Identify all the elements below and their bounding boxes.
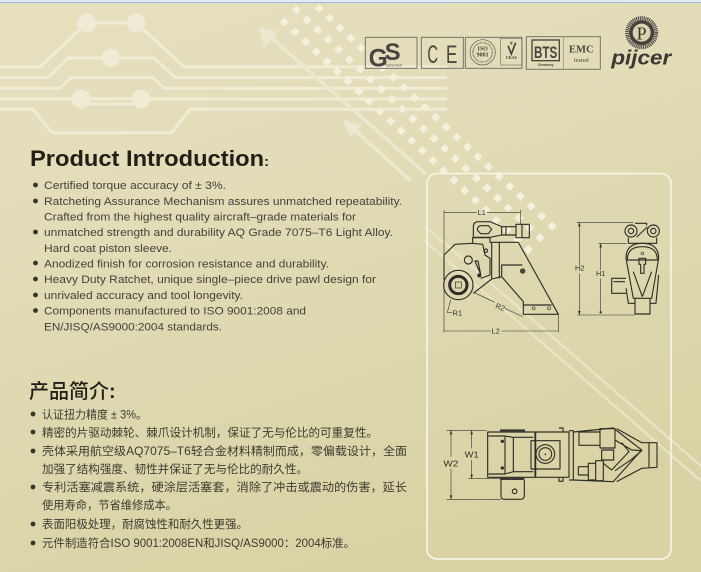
top view dimensions: W2 xyxy=(443,458,459,468)
logo: GS xyxy=(365,37,417,73)
logo: ISO 9001 UKAS: ♛ xyxy=(509,40,513,45)
English feature list xyxy=(33,180,402,334)
diagram: side view xyxy=(444,208,558,336)
front view dimensions: H1 xyxy=(596,269,605,278)
wrench front view xyxy=(612,223,659,314)
logo: GS: S xyxy=(385,39,401,66)
side view dimensions xyxy=(444,208,558,336)
logo: BTS EMC: Germany xyxy=(538,63,555,67)
side view dimensions: R2 xyxy=(494,301,506,313)
logo: CE xyxy=(421,37,463,69)
English feature list: EN/JISQ/AS9000:2004 standards. xyxy=(44,322,222,334)
wrench side view xyxy=(444,222,558,314)
logo: GS: G xyxy=(369,46,388,73)
Chinese feature list: 壳体采用航空级AQ7075–T6轻合金材料精制而成，零偏载设计，全面 xyxy=(42,444,407,458)
logo: BTS EMC: EMC xyxy=(569,45,594,56)
logo: ISO 9001 UKAS: UKAS xyxy=(506,55,518,60)
logo: CE: E xyxy=(446,42,457,69)
English feature list: Components manufactured to ISO 9001:2008 and xyxy=(44,306,306,318)
English feature list: Ratcheting Assurance Mechanism assures unmatched repeatability. xyxy=(44,196,402,208)
diagram: top view xyxy=(443,428,657,499)
diagonal arrows xyxy=(259,27,701,481)
Chinese feature list: 使用寿命，节省维修成本。 xyxy=(42,498,177,512)
side view dimensions: L2 xyxy=(492,327,500,336)
Chinese title: 产品简介: xyxy=(29,380,116,403)
front view dimensions xyxy=(575,222,635,315)
Chinese feature list: 精密的片驱动棘轮、棘爪设计机制，保证了无与伦比的可重复性。 xyxy=(42,426,378,440)
diamond dot bands xyxy=(282,6,554,252)
logo: ISO 9001 UKAS xyxy=(465,37,522,68)
logo: BTS EMC: tested xyxy=(574,57,590,64)
logo: GS: Sicherheit xyxy=(385,64,402,68)
logo: BTS EMC: BTS xyxy=(534,43,557,62)
logo: pijcer: P xyxy=(637,23,647,43)
Chinese feature list: 元件制造符合ISO 9001:2008EN和JISQ/AS9000：2004标准。 xyxy=(42,536,355,550)
logo: BTS EMC xyxy=(526,37,600,69)
English feature list: Certified torque accuracy of ± 3%. xyxy=(44,180,226,192)
logo: pijcer: pijcer xyxy=(610,47,672,70)
logo: ISO 9001 UKAS: 9001 xyxy=(477,53,489,59)
wrench top view xyxy=(488,428,657,499)
front view dimensions: H2 xyxy=(575,263,584,272)
top view dimensions xyxy=(443,430,501,499)
logo: CE: C xyxy=(427,42,438,69)
English feature list: Anodized finish for corrosion resistance and durability. xyxy=(44,258,329,270)
Chinese feature list: 专利活塞减震系统，硬涂层活塞套，消除了冲击或震动的伤害，延长 xyxy=(42,480,407,494)
certification logos xyxy=(365,18,672,73)
logo: ISO 9001 UKAS: ISO xyxy=(478,47,488,53)
side view dimensions: L1 xyxy=(478,208,486,217)
English feature list: unmatched strength and durability AQ Grade 7075–T6 Light Alloy. xyxy=(44,227,393,239)
English feature list: Heavy Duty Ratchet, unique single–piece drive pawl design for xyxy=(44,274,376,286)
circuit board pattern xyxy=(0,14,447,133)
side view dimensions: R1 xyxy=(453,309,462,318)
English feature list: Crafted from the highest quality aircraft–grade materials for xyxy=(44,212,356,224)
top view dimensions: W1 xyxy=(465,449,479,459)
Chinese feature list: 加强了结构强度、韧性并保证了无与伦比的耐久性。 xyxy=(42,462,308,476)
diagram: front view xyxy=(575,222,659,315)
panel: dimension drawings frame xyxy=(427,174,671,559)
English feature list: unrivaled accuracy and tool longevity. xyxy=(44,290,243,302)
title: Product Introduction: Product Introduction : xyxy=(30,146,269,171)
logo: pijcer xyxy=(610,18,672,70)
English feature list: Hard coat piston sleeve. xyxy=(44,243,172,255)
Chinese feature list: 认证扭力精度 ± 3%。 xyxy=(42,408,147,422)
Chinese feature list xyxy=(31,408,407,550)
Chinese feature list: 表面阳极处理，耐腐蚀性和耐久性更强。 xyxy=(42,517,248,531)
